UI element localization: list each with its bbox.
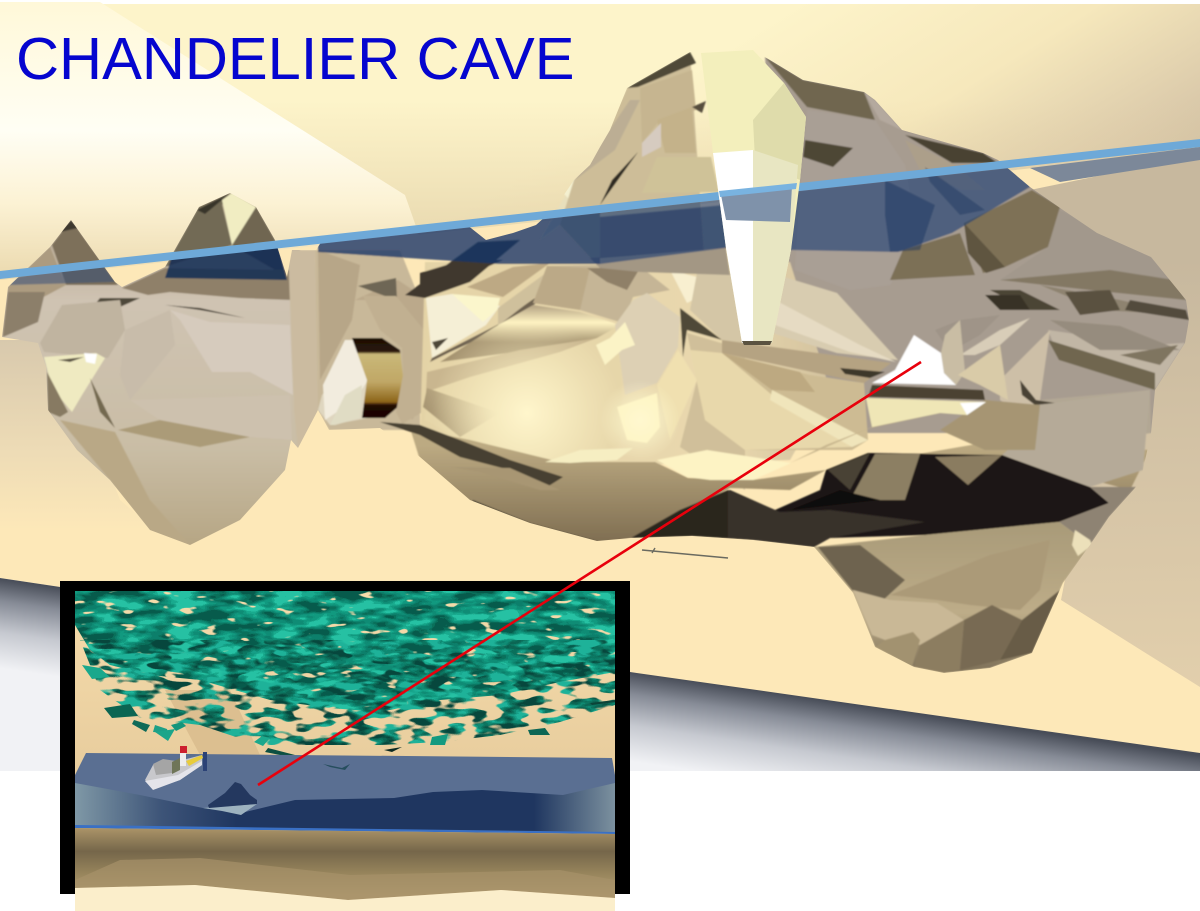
left lobe facets <box>2 193 293 545</box>
inset: deep sea ridge <box>75 783 615 833</box>
inset: boat <box>145 746 207 790</box>
inset: pale foreground dunes <box>75 885 615 911</box>
hanging lower lobe <box>814 522 1092 673</box>
arch around tube <box>363 296 426 424</box>
tube opening <box>352 338 404 418</box>
inset: lighter sand wedge <box>75 858 615 900</box>
water plane inside cave <box>0 165 1030 285</box>
mid sweep facets <box>690 277 898 450</box>
left lobe base <box>0 190 300 560</box>
scratch mark below cave <box>642 548 728 558</box>
inset: distant small fish shape <box>323 764 350 770</box>
right lower wall <box>1002 414 1146 488</box>
inset: frame <box>60 581 630 894</box>
lower band under chamber <box>410 428 1150 545</box>
callout line to inset <box>258 362 921 785</box>
right side grey facets <box>765 57 1189 450</box>
inset: shoreline <box>75 825 615 834</box>
hollow opening highlights <box>866 320 1040 450</box>
inset: underwater scene <box>75 591 615 911</box>
inset: teal kelp canopy <box>75 591 615 756</box>
central bright chamber <box>420 260 830 490</box>
floor shadow gradient <box>0 578 1200 771</box>
blue plane outside the cave <box>1030 147 1200 182</box>
dark underside <box>631 453 1136 547</box>
central column <box>288 250 320 450</box>
stalactite <box>701 50 806 345</box>
blue plane light edge <box>0 139 1200 279</box>
dark wedges above chamber <box>405 180 575 299</box>
dark strips lower left <box>380 422 597 541</box>
inset: sand banks <box>75 828 615 900</box>
inset: faint sloped shadow facet <box>165 690 260 755</box>
bright ledge <box>546 426 878 481</box>
cave model <box>0 52 1189 673</box>
inset: undersea rock <box>208 782 257 808</box>
centre-left chamber wall <box>315 250 428 430</box>
inset: pale seabed patch <box>203 804 257 815</box>
inset: water surface <box>75 753 615 815</box>
title: CHANDELIER CAVE <box>16 25 575 92</box>
inset background <box>75 591 615 911</box>
upper dome facets <box>560 52 730 275</box>
